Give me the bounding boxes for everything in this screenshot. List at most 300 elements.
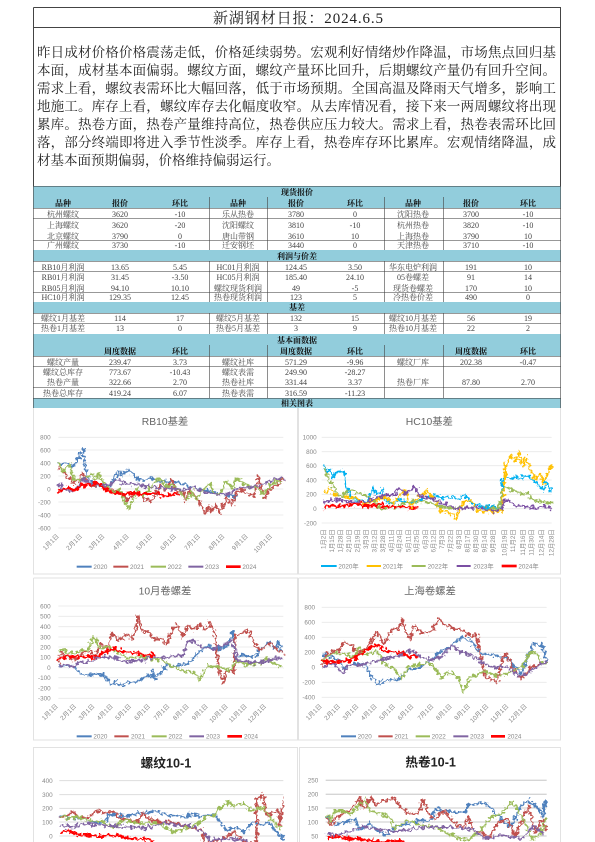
- section: profit and spreads: 现货卷螺差: [393, 283, 433, 293]
- commentary text block: [37, 44, 556, 169]
- section: fundamentals: 331.44: [285, 378, 307, 387]
- chart: HC10 basis: 6月3日: [421, 529, 429, 549]
- commentary text block: 地施工。库存上看，螺纹库存去化幅度收窄。从去库情况看，接下来一两周螺纹将出现: [37, 98, 556, 115]
- chart: HC10 basis: 8月17日: [464, 529, 472, 553]
- section: spot prices: 天津热卷: [397, 240, 429, 250]
- section: fundamentals: 87.80: [462, 378, 480, 387]
- section: spot prices: 3790: [112, 232, 128, 241]
- legend: 2022: [168, 734, 183, 741]
- section: fundamentals: 螺纹总库存: [43, 367, 83, 377]
- chart: RB10 basis: 600: [40, 447, 51, 454]
- chart: October coil-rebar spread: 9月1日: [190, 702, 210, 722]
- chart: Shanghai coil-rebar spread: 400: [304, 635, 315, 642]
- section: profit and spreads: 0: [526, 293, 530, 302]
- section: fundamentals: 2.70: [173, 378, 187, 387]
- chart: HC10 basis: HC10基差: [406, 415, 453, 428]
- chart: rebar 10-1 spread: 200: [42, 806, 53, 813]
- legend: 2024: [242, 564, 257, 571]
- chart: RB10 basis: RB10基差: [142, 415, 188, 428]
- section: spot prices: 报价: [288, 198, 304, 208]
- section: fundamentals: 419.24: [109, 389, 131, 398]
- legend: 2021年: [383, 561, 404, 570]
- chart: October coil-rebar spread: 600: [40, 603, 51, 610]
- chart: RB10 basis: 9月1日: [230, 532, 250, 552]
- section: profit and spreads: 5.45: [173, 263, 187, 272]
- chart: October coil-rebar spread: 10月卷螺差: [139, 584, 191, 597]
- section: basis: 13: [116, 324, 124, 333]
- section: profit and spreads: 191: [465, 263, 477, 272]
- chart: HC10 basis: 12月28日: [548, 529, 556, 556]
- chart: RB10 basis: 2月1日: [64, 532, 84, 552]
- section: profit and spreads: 31.45: [111, 273, 129, 282]
- legend: [77, 564, 257, 571]
- chart: HC10 basis: 7月3日: [438, 529, 446, 549]
- section: profit and spreads: 螺纹现货利润: [214, 283, 262, 293]
- chart: Shanghai coil-rebar spread: 9月1日: [452, 702, 472, 722]
- chart: hot coil 10-1 spread: 150: [308, 805, 319, 812]
- section: spot prices: 3620: [112, 210, 128, 219]
- section: spot prices: 沈阳热卷: [397, 209, 429, 219]
- section: spot prices: 杭州热卷: [397, 220, 429, 230]
- section: profit and spreads: 热卷现货利润: [214, 292, 262, 302]
- section: profit and spreads: 14: [524, 273, 532, 282]
- chart: HC10 basis: 2月10日: [345, 529, 353, 553]
- chart: rebar 10-1 spread: 300: [42, 792, 53, 799]
- chart: hot coil 10-1 spread: [308, 755, 547, 842]
- section: profit and spreads: 12.45: [171, 293, 189, 302]
- section: spot prices: 品种: [230, 198, 246, 208]
- commentary text block: 落，部分终端即将进入季节性淡季。库存上看，热卷库存环比累库。宏观情绪降温，成: [37, 134, 556, 151]
- chart: October coil-rebar spread: -100: [38, 675, 51, 682]
- chart: Shanghai coil-rebar spread: 10月1日: [468, 702, 490, 724]
- chart: HC10 basis: 400: [306, 477, 317, 484]
- chart: HC10 basis: 11月30日: [528, 529, 536, 556]
- chart: RB10 basis: -600: [38, 525, 51, 532]
- section: spot prices: -10: [175, 210, 185, 219]
- chart: RB10 basis: 8月1日: [207, 532, 226, 552]
- section: fundamentals: -10.43: [170, 368, 190, 377]
- chart: October coil-rebar spread: -300: [38, 696, 51, 703]
- commentary text block: 本面，成材基本面偏弱。螺纹方面，螺纹产量环比回升，后期螺纹产量仍有回升空间。: [37, 62, 556, 79]
- section: fundamentals: 239.47: [109, 358, 131, 367]
- section: profit and spreads: 华东电炉利润: [389, 262, 437, 272]
- section: basis: 17: [176, 314, 184, 323]
- section: spot prices: -10: [350, 221, 360, 230]
- chart: HC10 basis: 200: [306, 492, 317, 499]
- section: profit and spreads: 13.65: [111, 263, 129, 272]
- chart: Shanghai coil-rebar spread: -200: [302, 680, 315, 687]
- section: fundamentals: 热卷厂库: [397, 377, 429, 387]
- section: spot prices: 环比: [172, 198, 188, 208]
- section: spot prices: 沈阳螺纹: [222, 220, 254, 230]
- section: fundamentals: 螺纹社库: [222, 357, 254, 367]
- legend: 2020: [93, 734, 108, 741]
- chart: HC10 basis: 6月12日: [430, 529, 438, 553]
- chart: rebar 10-1 spread: [42, 755, 283, 842]
- legend: 2020年: [338, 561, 359, 570]
- section: fundamentals: 环比: [520, 346, 536, 356]
- section: basis: 22: [467, 324, 475, 333]
- chart: hot coil 10-1 spread: 50: [311, 833, 319, 840]
- legend: 2021: [130, 564, 145, 571]
- commentary text block: 昨日成材价格价格震荡走低，价格延续弱势。宏观利好情绪炒作降温，市场焦点回归基: [37, 44, 556, 61]
- section: fundamentals: 热卷表需: [222, 388, 254, 398]
- section: fundamentals: -9.96: [347, 358, 363, 367]
- section: spot prices: -20: [175, 221, 185, 230]
- chart: RB10 basis: 5月1日: [134, 532, 154, 552]
- chart: RB10 basis: 200: [40, 473, 51, 480]
- chart: HC10 basis: 9月14日: [480, 529, 488, 553]
- section: spot prices: 3820: [463, 221, 479, 230]
- section: profit and spreads: 185.40: [285, 273, 307, 282]
- chart: HC10 basis: 12月14日: [538, 529, 546, 556]
- chart: HC10 basis: 11月2日: [509, 529, 517, 552]
- data table: [33, 186, 561, 408]
- data lines: [322, 618, 547, 692]
- section: spot prices: 报价: [112, 198, 128, 208]
- chart: Shanghai coil-rebar spread: -400: [302, 695, 315, 702]
- chart: HC10 basis: 1000: [303, 435, 317, 442]
- section: spot prices: -10: [523, 210, 533, 219]
- chart: Shanghai coil-rebar spread: 8月1日: [434, 702, 454, 722]
- chart: October coil-rebar spread: 6月1日: [132, 702, 152, 722]
- chart: October coil-rebar spread: 12月1日: [246, 702, 268, 724]
- chart: Shanghai coil-rebar spread: 0: [311, 665, 315, 672]
- chart: RB10 basis: 7月1日: [182, 532, 202, 552]
- legend: 2023年: [473, 561, 494, 570]
- section: fundamentals: [43, 335, 536, 398]
- section: profit and spreads: 冷热卷价差: [393, 292, 433, 302]
- section: basis: 热卷1月基差: [41, 323, 85, 333]
- section: profit and spreads: HC01月利润: [216, 262, 260, 272]
- section: spot prices: 3610: [288, 232, 304, 241]
- chart: HC10 basis: 3月28日: [379, 529, 387, 553]
- section: basis: 9: [353, 324, 357, 333]
- section: profit and spreads: 94.10: [111, 284, 129, 293]
- chart: RB10 basis: 6月1日: [158, 532, 178, 552]
- section: spot prices: 0: [178, 232, 182, 241]
- chart: RB10 basis: 800: [40, 435, 51, 442]
- section: spot prices: 品种: [55, 198, 71, 208]
- section: basis: 114: [114, 314, 126, 323]
- legend: 2022年: [428, 561, 449, 570]
- section: basis: 19: [524, 314, 532, 323]
- legend: 2020: [358, 734, 372, 741]
- chart: Shanghai coil-rebar spread: 6月1日: [396, 702, 415, 722]
- section: profit and spreads: 05卷螺差: [397, 272, 429, 282]
- section: fundamentals: 2.70: [521, 378, 535, 387]
- chart: HC10 basis: 1月2日: [320, 529, 328, 549]
- section: profit and spreads: -5: [352, 284, 358, 293]
- section: spot prices: 现货报价: [281, 187, 313, 197]
- section: fundamentals: 571.29: [285, 358, 307, 367]
- chart: RB10 basis: 10月1日: [252, 532, 274, 554]
- section: fundamentals: 316.59: [285, 389, 307, 398]
- chart: hot coil 10-1 spread: 100: [308, 819, 319, 826]
- chart: HC10 basis: 5月11日: [404, 529, 412, 552]
- section: fundamentals: 249.90: [285, 368, 307, 377]
- section: spot prices: 环比: [520, 198, 536, 208]
- chart: Shanghai coil-rebar spread: 4月1日: [359, 702, 379, 722]
- legend: 2023: [470, 734, 485, 741]
- section: fundamentals: -28.27: [345, 368, 365, 377]
- chart: RB10 basis: 4月1日: [111, 532, 131, 552]
- legend: 2024: [507, 734, 522, 741]
- chart: HC10 basis: 2月19日: [353, 529, 361, 553]
- chart: RB10 basis: [38, 415, 283, 571]
- section: spot prices: 0: [353, 241, 357, 250]
- chart: RB10 basis: 400: [40, 460, 51, 467]
- chart: October coil-rebar spread: 5月1日: [113, 702, 133, 722]
- commentary text block: 累库。热卷方面，热卷产量维持高位，热卷供应压力较大。需求上看，热卷表需环比回: [37, 116, 556, 133]
- section: fundamentals: 202.38: [460, 358, 482, 367]
- legend: 2021: [394, 734, 409, 741]
- chart: October coil-rebar spread: 8月1日: [171, 702, 191, 722]
- chart: rebar 10-1 spread: 螺纹10-1: [141, 755, 191, 770]
- chart: HC10 basis: 3月3日: [362, 529, 370, 549]
- data lines: [327, 797, 546, 842]
- section: basis: 2: [526, 324, 530, 333]
- legend: 2023: [205, 564, 220, 571]
- section: spot prices: 10: [524, 232, 532, 241]
- chart: HC10 basis: 4月24日: [396, 529, 404, 553]
- section: basis: 0: [178, 324, 182, 333]
- legend: [77, 734, 259, 741]
- chart: HC10 basis: 7月22日: [447, 529, 455, 553]
- chart: HC10 basis: 5月25日: [413, 529, 421, 553]
- chart: RB10 basis: -200: [38, 499, 51, 506]
- section: profit and spreads: RB05月利润: [42, 283, 84, 293]
- chart: October coil-rebar spread: 10月1日: [208, 702, 230, 724]
- chart: Shanghai coil-rebar spread: 7月1日: [416, 702, 435, 722]
- section: fundamentals: 周度数据: [104, 346, 136, 356]
- section: basis: 15: [351, 314, 359, 323]
- section: spot prices: 乐从热卷: [222, 209, 254, 219]
- section: spot prices: 上海螺纹: [47, 220, 79, 230]
- chart: HC10 basis: 1月15日: [328, 529, 336, 553]
- chart: HC10 basis: 1月28日: [337, 529, 345, 553]
- chart: Shanghai coil-rebar spread: 3月1日: [341, 702, 360, 722]
- section: basis: 热卷10月基差: [389, 323, 437, 333]
- section: basis: 热卷5月基差: [216, 323, 260, 333]
- chart: hot coil 10-1 spread: 200: [308, 792, 319, 799]
- chart: HC10 basis: 8月30日: [472, 529, 480, 553]
- section: spot prices: 3730: [112, 241, 128, 250]
- chart: Shanghai coil-rebar spread: [302, 584, 547, 741]
- page frame: [34, 8, 560, 186]
- section: profit and spreads: [41, 251, 532, 302]
- section: spot prices: 3810: [288, 221, 304, 230]
- chart: October coil-rebar spread: 400: [40, 624, 51, 631]
- section heading: related charts: 相关图表: [281, 398, 313, 408]
- commentary text block: 需求上看，螺纹表需环比大幅回落，低于市场预期。全国高温及降雨天气增多，影响工: [37, 80, 556, 97]
- chart: Shanghai coil-rebar spread: 12月1日: [507, 702, 529, 724]
- section: fundamentals: 环比: [172, 346, 188, 356]
- section: fundamentals: 热卷产量: [47, 377, 79, 387]
- chart: October coil-rebar spread: 100: [40, 655, 51, 662]
- chart: October coil-rebar spread: -200: [38, 685, 51, 692]
- section: spot prices: 10: [351, 232, 359, 241]
- legend: 2021: [131, 734, 146, 741]
- chart: HC10 basis: 8月3日: [455, 529, 463, 549]
- chart: RB10 basis: 1月1日: [41, 532, 61, 552]
- chart: HC10 basis: -200: [304, 520, 317, 527]
- section: spot prices: -10: [523, 241, 533, 250]
- chart: rebar 10-1 spread: 400: [42, 778, 53, 785]
- section: spot prices: 北京螺纹: [47, 231, 79, 241]
- chart: HC10 basis: 9月28日: [489, 529, 497, 553]
- section: spot prices: -10: [523, 221, 533, 230]
- section: fundamentals: 热卷总库存: [43, 388, 83, 398]
- chart: October coil-rebar spread: 300: [40, 634, 51, 641]
- chart: October coil-rebar spread: [38, 584, 283, 741]
- section: profit and spreads: HC05月利润: [216, 272, 260, 282]
- section: spot prices: 上海热卷: [397, 231, 429, 241]
- section: profit and spreads: 利润与价差: [277, 251, 317, 261]
- legend: 2024: [244, 734, 259, 741]
- section: spot prices: 报价: [463, 198, 479, 208]
- chart: October coil-rebar spread: 1月1日: [40, 702, 60, 722]
- section: fundamentals: 322.66: [109, 378, 131, 387]
- section: profit and spreads: HC10月利润: [41, 292, 85, 302]
- data lines: [58, 615, 283, 686]
- title: 新湖钢材日报：2024.6.5: [213, 9, 383, 27]
- data lines: [323, 452, 552, 519]
- chart: Shanghai coil-rebar spread: 11月1日: [489, 702, 510, 724]
- chart: Shanghai coil-rebar spread: 600: [304, 620, 315, 627]
- section: fundamentals: 周度数据: [280, 346, 312, 356]
- section: spot prices: -10: [175, 241, 185, 250]
- section: profit and spreads: 10: [524, 263, 532, 272]
- section: spot prices: 广州螺纹: [47, 240, 79, 250]
- chart: rebar 10-1 spread: 100: [42, 819, 53, 826]
- section: profit and spreads: 24.10: [346, 273, 364, 282]
- chart: October coil-rebar spread: 3月1日: [77, 702, 96, 722]
- section: basis: [41, 302, 532, 333]
- section: basis: 132: [290, 314, 302, 323]
- chart: October coil-rebar spread: 0: [47, 665, 51, 672]
- section: fundamentals: -11.23: [345, 389, 365, 398]
- chart: RB10 basis: -400: [38, 512, 51, 519]
- section: fundamentals: 热卷社库: [222, 377, 254, 387]
- chart: Shanghai coil-rebar spread: 5月1日: [377, 702, 397, 722]
- chart: HC10 basis: 10月19日: [500, 529, 508, 556]
- chart: October coil-rebar spread: 11月1日: [227, 702, 249, 724]
- chart: HC10 basis: 600: [306, 463, 317, 470]
- section: profit and spreads: 129.35: [109, 293, 131, 302]
- section: spot prices: 3780: [288, 210, 304, 219]
- legend: 2024年: [518, 561, 539, 570]
- legend: 2022: [432, 734, 446, 741]
- legend: [321, 561, 539, 570]
- chart: October coil-rebar spread: 7月1日: [152, 702, 171, 722]
- section: profit and spreads: -3.50: [172, 273, 188, 282]
- chart: HC10 basis: 4月11日: [387, 529, 395, 552]
- commentary text block: 材基本面预期偏弱，价格维持偏弱运行。: [37, 152, 280, 169]
- section: spot prices: [47, 187, 536, 250]
- section: profit and spreads: 170: [465, 284, 477, 293]
- chart: HC10 basis: 800: [306, 449, 317, 456]
- section: profit and spreads: RB01月利润: [42, 272, 84, 282]
- section: spot prices: 3790: [463, 232, 479, 241]
- section: fundamentals: 3.37: [348, 378, 362, 387]
- section: spot prices: 3700: [463, 210, 479, 219]
- section: fundamentals: 螺纹表需: [222, 367, 254, 377]
- chart: Shanghai coil-rebar spread: 1月1日: [304, 702, 324, 722]
- section: basis: 螺纹1月基差: [41, 313, 85, 323]
- section: basis: 螺纹5月基差: [216, 313, 260, 323]
- section: spot prices: 环比: [347, 198, 363, 208]
- chart: October coil-rebar spread: 200: [40, 644, 51, 651]
- section: profit and spreads: 91: [467, 273, 475, 282]
- section: spot prices: 3440: [288, 241, 304, 250]
- chart: HC10 basis: [303, 415, 556, 570]
- chart: RB10 basis: 3月1日: [87, 532, 106, 552]
- section: fundamentals: 螺纹产量: [47, 357, 79, 367]
- section: fundamentals: -0.47: [520, 358, 536, 367]
- chart: HC10 basis: 3月12日: [370, 529, 378, 553]
- section: profit and spreads: 123: [290, 293, 302, 302]
- section: profit and spreads: 10: [524, 284, 532, 293]
- section: spot prices: 唐山带钢: [222, 231, 254, 241]
- data lines: [60, 795, 283, 842]
- chart: Shanghai coil-rebar spread: 2月1日: [322, 702, 342, 722]
- section: spot prices: 3710: [463, 241, 479, 250]
- section: basis: 基差: [289, 302, 305, 312]
- section: profit and spreads: 10.10: [171, 284, 189, 293]
- section: spot prices: 迁安钢坯: [222, 240, 255, 250]
- chart: hot coil 10-1 spread: 250: [308, 778, 319, 785]
- section: profit and spreads: RB10月利润: [42, 262, 84, 272]
- chart panel frames: [34, 408, 560, 842]
- section: spot prices: 品种: [405, 198, 421, 208]
- section: spot prices: 3620: [112, 221, 128, 230]
- chart: Shanghai coil-rebar spread: 800: [304, 605, 315, 612]
- chart: October coil-rebar spread: 500: [40, 614, 51, 621]
- chart: October coil-rebar spread: 2月1日: [58, 702, 78, 722]
- section: fundamentals: 环比: [347, 346, 363, 356]
- section: profit and spreads: 490: [465, 293, 477, 302]
- section: fundamentals: 6.07: [173, 389, 187, 398]
- section: fundamentals: 3.73: [173, 358, 187, 367]
- chart: HC10 basis: 0: [313, 506, 317, 513]
- section: spot prices: 0: [353, 210, 357, 219]
- data lines: [57, 449, 283, 514]
- section: fundamentals: 周度数据: [455, 346, 487, 356]
- section: profit and spreads: 124.45: [285, 263, 307, 272]
- section: profit and spreads: 5: [353, 293, 357, 302]
- section: fundamentals: 基本面数据: [277, 335, 317, 345]
- legend: [341, 734, 522, 741]
- chart: RB10 basis: 0: [47, 486, 51, 493]
- chart: Shanghai coil-rebar spread: 200: [304, 650, 315, 657]
- section: fundamentals: 773.67: [109, 368, 131, 377]
- chart: Shanghai coil-rebar spread: 上海卷螺差: [404, 584, 456, 597]
- chart: rebar 10-1 spread: 0: [49, 833, 53, 840]
- chart: hot coil 10-1 spread: 热卷10-1: [405, 755, 456, 770]
- section: basis: 3: [294, 324, 298, 333]
- section: profit and spreads: 3.50: [348, 263, 362, 272]
- section: fundamentals: 螺纹厂库: [397, 357, 429, 367]
- chart: HC10 basis: 11月16日: [519, 529, 527, 556]
- legend: 2023: [206, 734, 221, 741]
- section: basis: 螺纹10月基差: [389, 313, 437, 323]
- section: spot prices: 杭州螺纹: [47, 209, 79, 219]
- legend: 2020: [93, 564, 108, 571]
- section: profit and spreads: 49: [292, 284, 300, 293]
- chart: October coil-rebar spread: 4月1日: [95, 702, 115, 722]
- section: basis: 56: [467, 314, 475, 323]
